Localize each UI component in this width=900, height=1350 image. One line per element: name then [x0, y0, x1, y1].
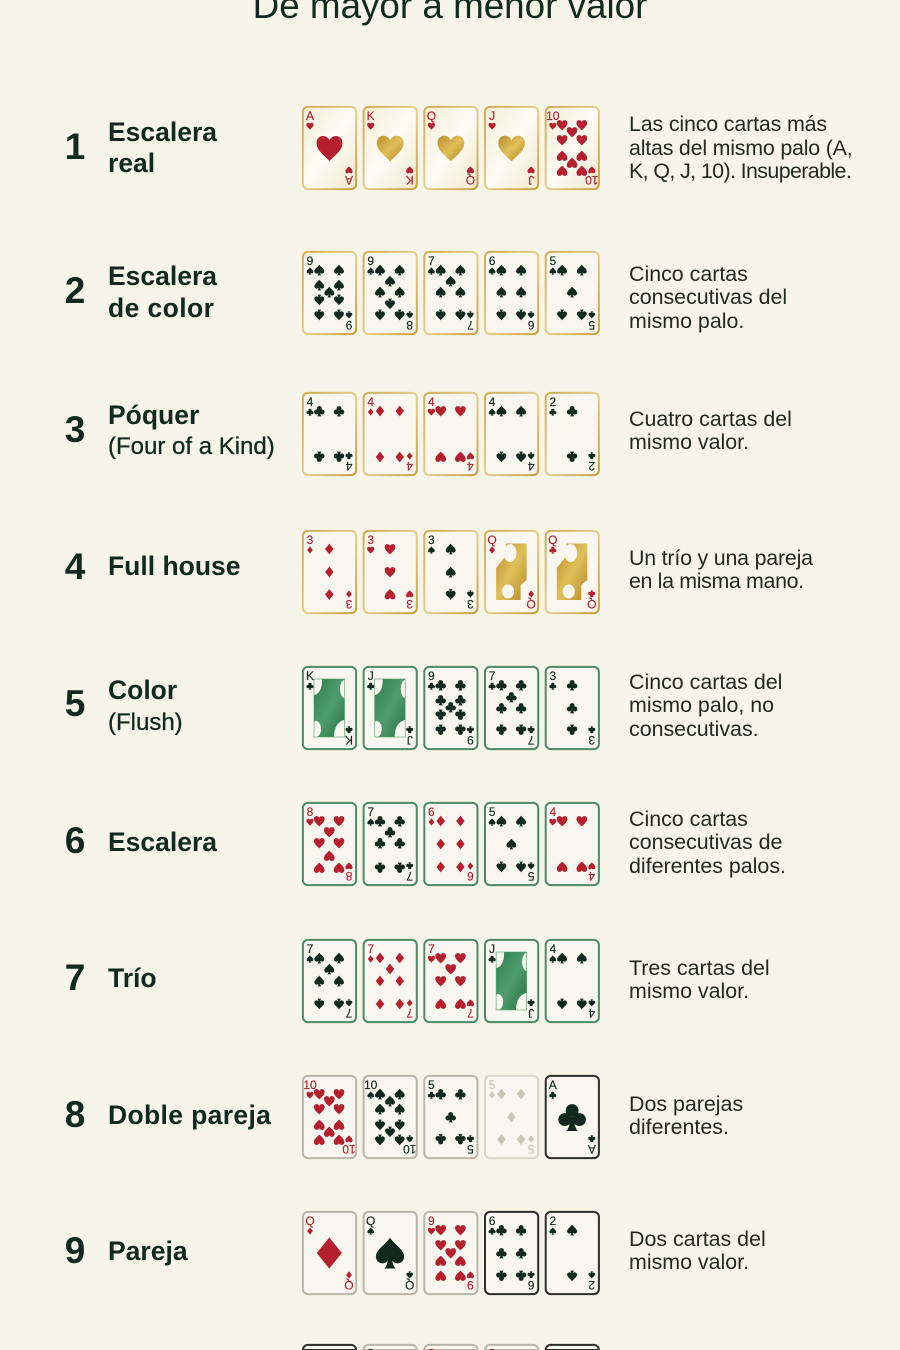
cards: full house: Q: [487, 533, 497, 547]
description: Tres cartas del: [629, 956, 770, 980]
cards: two pair: 10: [364, 1078, 378, 1092]
cards: one pair: Q: [344, 1278, 354, 1292]
cards: straight flush: 5: [549, 254, 556, 268]
cards: flush: K: [345, 733, 353, 747]
cards: two pair: 10: [403, 1142, 416, 1156]
cards: four of a kind: 4: [307, 395, 314, 409]
description: consecutivas.: [629, 717, 759, 741]
hand name: Full house: [108, 551, 240, 581]
cards: one pair: 6: [527, 1278, 534, 1292]
row 3: poquer: [65, 393, 792, 475]
cards: flush: 9: [428, 669, 435, 683]
cards: flush: [303, 667, 599, 752]
description: mismo valor.: [629, 1250, 749, 1274]
cards: three of a kind: J: [489, 942, 495, 956]
cards: straight: 8: [307, 805, 314, 819]
description: Cinco cartas: [629, 807, 748, 831]
cards: four of a kind: 4: [406, 459, 413, 473]
cards: four of a kind: 2: [549, 395, 556, 409]
cards: four of a kind: 4: [367, 395, 374, 409]
description: Dos cartas del: [629, 1227, 766, 1251]
hand name: Trío: [108, 963, 157, 993]
cards: royal flush: J: [489, 109, 495, 123]
cards: straight flush: [303, 252, 599, 334]
cards: straight: 5: [489, 805, 496, 819]
cards: royal flush: [303, 107, 599, 189]
row 5: color: [65, 667, 782, 752]
cards: full house: 3: [367, 533, 374, 547]
cards: straight: 6: [467, 869, 474, 883]
rank number 1: 1: [65, 126, 85, 167]
cards: full house: 3: [406, 597, 413, 611]
cards: three of a kind: 4: [549, 942, 556, 956]
cards: four of a kind: 4: [428, 395, 435, 409]
cards: flush: J: [407, 733, 413, 747]
cards: straight flush: 6: [527, 318, 534, 332]
cards: one pair: 6: [489, 1214, 496, 1228]
cards: three of a kind: 4: [588, 1006, 595, 1020]
rank number 7: 7: [65, 957, 85, 998]
cards: three of a kind: 7: [406, 1006, 413, 1020]
hand name: real: [108, 148, 155, 178]
cards: one pair: [303, 1212, 599, 1294]
cards: royal flush: 10: [585, 173, 598, 187]
cards: straight: 5: [527, 869, 534, 883]
cards: three of a kind: 7: [428, 942, 435, 956]
cards: three of a kind: 7: [467, 1006, 474, 1020]
hand name: Color: [108, 675, 177, 705]
cards: one pair: 9: [467, 1278, 474, 1292]
cards: royal flush: Q: [466, 173, 475, 187]
cards: three of a kind: 7: [345, 1006, 352, 1020]
cards: straight flush: 7: [467, 318, 474, 332]
cards: straight: 8: [345, 869, 352, 883]
cards: full house: Q: [548, 533, 557, 547]
cards: flush: 7: [527, 733, 534, 747]
cards: straight flush: 6: [489, 254, 496, 268]
cards: flush: 3: [588, 733, 595, 747]
rank number 8: 8: [65, 1094, 85, 1135]
description: consecutivas del: [629, 285, 787, 309]
description: Cinco cartas: [629, 262, 748, 286]
cards: flush: 7: [489, 669, 496, 683]
cards: straight flush: 8: [406, 318, 413, 332]
cards: one pair: Q: [405, 1278, 414, 1292]
cards: three of a kind: 7: [307, 942, 314, 956]
row 4: full house: [65, 531, 813, 613]
cards: full house: 3: [307, 533, 314, 547]
cards: one pair: 2: [588, 1278, 595, 1292]
hand name: Pareja: [108, 1236, 188, 1266]
row 2: escalera de color: [65, 252, 787, 334]
description: Dos parejas: [629, 1092, 743, 1116]
hand subtitle: (Flush): [108, 709, 183, 736]
cards: one pair: 2: [549, 1214, 556, 1228]
description: Cinco cartas del: [629, 670, 782, 694]
hand name: de color: [108, 293, 214, 323]
cards: royal flush: 10: [546, 109, 560, 123]
description: altas del mismo palo (A,: [629, 136, 852, 160]
rank number 4: 4: [65, 546, 86, 587]
hand name: Doble pareja: [108, 1100, 271, 1130]
cards: one pair: Q: [366, 1214, 375, 1228]
description: consecutivas de: [629, 830, 782, 854]
cards: straight: 4: [588, 869, 595, 883]
cards: full house: 3: [345, 597, 352, 611]
cards: two pair: 5: [527, 1142, 534, 1156]
description: Cuatro cartas del: [629, 407, 792, 431]
cards: straight: 4: [549, 805, 556, 819]
cards: flush: J: [368, 669, 374, 683]
row 7: trio: [65, 940, 770, 1025]
cards: two pair: 5: [489, 1078, 496, 1092]
cards: two pair: 5: [428, 1078, 435, 1092]
cards: four of a kind: 4: [527, 459, 534, 473]
cards: royal flush: J: [528, 173, 534, 187]
cards: flush: K: [306, 669, 314, 683]
description: mismo palo.: [629, 309, 744, 333]
row 9: pareja: [65, 1212, 766, 1294]
cards: straight: 7: [367, 805, 374, 819]
cards: three of a kind: J: [528, 1006, 534, 1020]
cards: full house: Q: [587, 597, 596, 611]
cards: two pair: 10: [303, 1078, 317, 1092]
cards: full house: 3: [467, 597, 474, 611]
cards: straight flush: 5: [588, 318, 595, 332]
hand name: Escalera: [108, 261, 217, 291]
rank number 6: 6: [65, 820, 85, 861]
description: en la misma mano.: [629, 569, 804, 593]
cards: royal flush: A: [306, 109, 314, 123]
hand name: Escalera: [108, 827, 217, 857]
cards: full house: Q: [526, 597, 536, 611]
description: Un trío y una pareja: [629, 546, 813, 570]
cards: royal flush: K: [406, 173, 414, 187]
cards: straight flush: 9: [367, 254, 374, 268]
hand name: Póquer: [108, 400, 199, 430]
cards: two pair: 5: [467, 1142, 474, 1156]
row 8: doble pareja: [65, 1076, 743, 1158]
cards: four of a kind: 4: [489, 395, 496, 409]
cards: two pair: A: [588, 1142, 596, 1156]
description: mismo valor.: [629, 979, 749, 1003]
cards: royal flush: A: [345, 173, 353, 187]
cards: straight: 7: [406, 869, 413, 883]
cards: straight flush: 9: [307, 254, 314, 268]
description: K, Q, J, 10). Insuperable.: [629, 159, 851, 183]
description: Las cinco cartas más: [629, 112, 827, 136]
row 6: escalera: [65, 803, 786, 885]
rank number 3: 3: [65, 409, 85, 450]
cards: one pair: 9: [428, 1214, 435, 1228]
cards: full house: [303, 531, 599, 613]
cards: royal flush: Q: [427, 109, 436, 123]
row 10: card tops cut off at the bottom edge: [303, 1345, 599, 1350]
row 1: escalera real: [65, 107, 852, 189]
cards: two pair: 10: [342, 1142, 356, 1156]
description: diferentes palos.: [629, 854, 786, 878]
rank number 2: 2: [65, 270, 85, 311]
cards: flush: 3: [549, 669, 556, 683]
hand subtitle: (Four of a Kind): [108, 433, 275, 460]
rank number 5: 5: [65, 683, 85, 724]
description: diferentes.: [629, 1115, 729, 1139]
cards: straight: [303, 803, 599, 885]
cards: four of a kind: [303, 393, 599, 475]
cards: flush: 9: [467, 733, 474, 747]
rank number 9: 9: [65, 1230, 85, 1271]
description: mismo valor.: [629, 430, 749, 454]
cards: one pair: Q: [305, 1214, 315, 1228]
cards: full house: 3: [428, 533, 435, 547]
cards: straight flush: 9: [345, 318, 352, 332]
cards: two pair: A: [549, 1078, 557, 1092]
cards: three of a kind: [303, 940, 599, 1025]
hand name: Escalera: [108, 117, 217, 147]
cards: royal flush: K: [367, 109, 375, 123]
cards: two pair: [303, 1076, 599, 1158]
cards: straight: 6: [428, 805, 435, 819]
cards: three of a kind: 7: [367, 942, 374, 956]
cards: straight flush: 7: [428, 254, 435, 268]
cards: four of a kind: 2: [588, 459, 595, 473]
cards: four of a kind: 4: [345, 459, 352, 473]
cards: four of a kind: 4: [467, 459, 474, 473]
description: mismo palo, no: [629, 693, 774, 717]
